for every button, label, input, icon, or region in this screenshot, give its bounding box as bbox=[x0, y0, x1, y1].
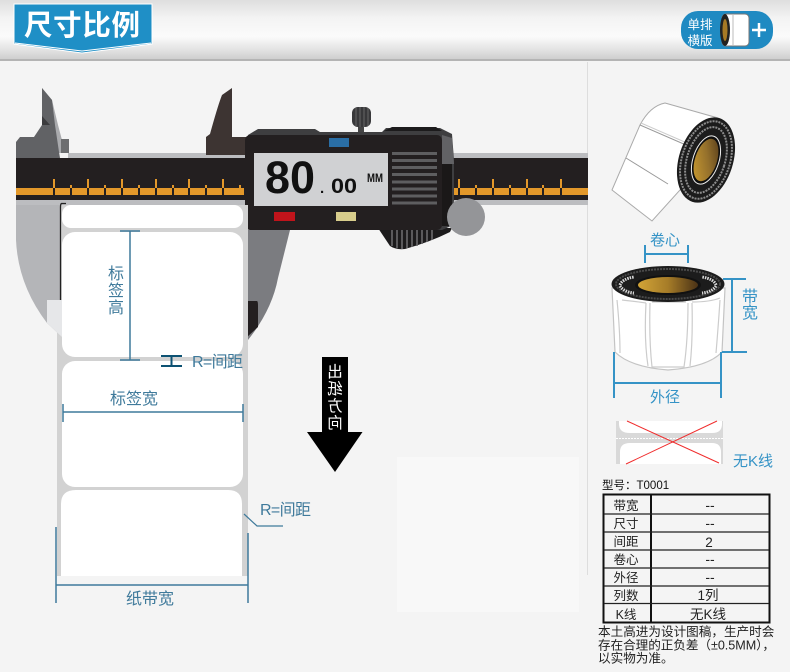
bottom rail bbox=[16, 200, 588, 205]
core dimension bbox=[645, 232, 688, 263]
red button bbox=[274, 212, 295, 221]
spec table: K线 bbox=[616, 608, 637, 622]
badge text: 单排 bbox=[687, 18, 713, 32]
caliper: 00 bbox=[331, 175, 357, 198]
arrow text: 纸 bbox=[327, 380, 343, 398]
arrow text: 出 bbox=[327, 363, 343, 381]
header bar bbox=[0, 0, 790, 61]
disclaimer note: 本土高进为设计图稿，生产时会 bbox=[598, 624, 775, 639]
gap text: R=间距 bbox=[192, 353, 243, 371]
outer diameter text: 外径 bbox=[650, 389, 680, 406]
callout: corner gap bbox=[244, 501, 311, 526]
upper left jaw bbox=[42, 88, 62, 153]
thumb wheel bottom bbox=[378, 228, 452, 249]
corner gap text: R=间距 bbox=[260, 501, 311, 519]
model number: 型号：T0001 bbox=[602, 478, 669, 492]
band width dimension bbox=[722, 279, 758, 352]
ridged top wheel bbox=[384, 127, 442, 131]
slider body bbox=[245, 135, 442, 230]
title badge bbox=[14, 4, 152, 53]
LCD screen bbox=[254, 153, 388, 206]
label height text: 高 bbox=[108, 299, 124, 317]
slider body back bbox=[245, 128, 454, 230]
spec table: -- bbox=[705, 551, 715, 567]
icon: front label roll bbox=[612, 266, 725, 370]
blue indicator bbox=[329, 138, 349, 147]
orange ruler bbox=[16, 179, 588, 195]
no K-line illustration bbox=[616, 421, 773, 470]
no K-line text: 无K线 bbox=[733, 453, 773, 470]
disclaimer note: 以实物为准。 bbox=[598, 652, 674, 666]
label height text: 签 bbox=[108, 282, 124, 300]
spec table: 1列 bbox=[697, 588, 719, 603]
dimension: gap bbox=[161, 353, 243, 371]
spec table: 2 bbox=[705, 535, 713, 550]
icon: plus bbox=[752, 23, 766, 37]
dimension: label width bbox=[63, 390, 243, 422]
caliper lower jaw left bbox=[16, 200, 62, 337]
top rail bbox=[68, 153, 588, 158]
badge: single row landscape bbox=[681, 11, 773, 49]
tape width text: 纸带宽 bbox=[126, 590, 174, 608]
label height text: 标 bbox=[108, 265, 124, 283]
badge: single row landscape: 横版 bbox=[687, 34, 713, 48]
speaker grille bbox=[392, 154, 437, 203]
spec table: 外径 bbox=[613, 571, 639, 585]
spec table: -- bbox=[705, 497, 715, 513]
spec table: 无K线 bbox=[690, 607, 726, 622]
band width text: 宽 bbox=[742, 304, 758, 322]
LCD digits: 80 bbox=[265, 152, 315, 203]
spec table: 尺寸 bbox=[613, 517, 639, 531]
outer diameter dimension bbox=[614, 352, 721, 406]
yellow button bbox=[336, 212, 356, 221]
label width text: 标签宽 bbox=[110, 390, 158, 408]
arrow text: 向 bbox=[327, 414, 343, 432]
main scale bar bbox=[16, 158, 588, 200]
arrow: paper output direction bbox=[307, 357, 362, 472]
core text: 卷心 bbox=[650, 232, 680, 249]
spec table: 卷心 bbox=[613, 552, 639, 567]
spec table: 带宽 bbox=[613, 498, 639, 513]
dimension: label height bbox=[108, 231, 140, 360]
arrow text: 方 bbox=[327, 397, 343, 415]
icon: mini roll bbox=[720, 14, 749, 46]
caliper: MM bbox=[367, 171, 383, 185]
title text: 尺寸比例 bbox=[24, 10, 140, 42]
icon: angled label roll bbox=[612, 103, 745, 221]
knob top bbox=[352, 107, 371, 132]
disclaimer note bbox=[598, 624, 775, 666]
spec table: -- bbox=[705, 569, 715, 585]
disclaimer note: 存在合理的正负差（±0.5MM）， bbox=[598, 638, 775, 652]
band width text: 带 bbox=[742, 288, 758, 306]
caliper: . bbox=[320, 180, 324, 197]
spec table: -- bbox=[705, 515, 715, 531]
caliper lower jaw right bbox=[246, 230, 290, 340]
dimension: tape width bbox=[56, 527, 248, 608]
label strip bbox=[47, 204, 248, 585]
thumb roller bbox=[447, 198, 485, 236]
caliper bbox=[16, 88, 588, 340]
spec table bbox=[604, 494, 770, 622]
upper right jaw bbox=[206, 88, 250, 155]
spec table: 列数 bbox=[613, 588, 639, 603]
spec table: 间距 bbox=[613, 535, 639, 549]
